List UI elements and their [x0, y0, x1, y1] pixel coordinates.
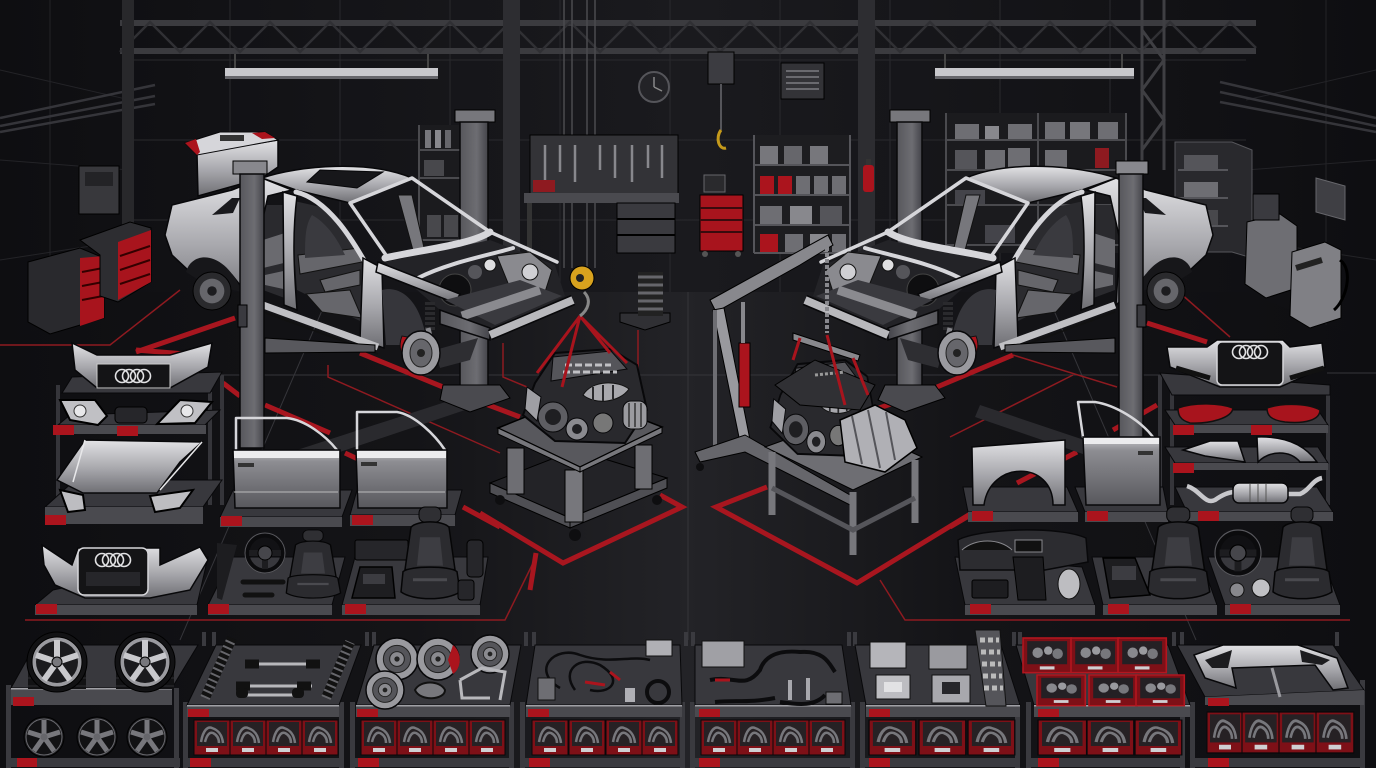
wall clock	[639, 72, 669, 102]
steering wheel and seat	[1215, 530, 1261, 576]
diagnostic machines right wall	[1245, 178, 1347, 328]
shelf: red hardware trays	[1016, 638, 1190, 767]
shelving back centre	[754, 135, 850, 253]
shelf: hoses and modules	[695, 641, 851, 767]
ceiling light left	[225, 54, 438, 79]
lower shelf row uprights	[6, 632, 1365, 768]
floor red guide lines	[0, 290, 1350, 620]
lifting hook and straps	[537, 316, 627, 387]
front bumper	[42, 545, 208, 598]
shelf: brakes	[356, 635, 521, 767]
steering wheel and seat set	[245, 533, 285, 573]
left interior platforms	[35, 507, 488, 615]
hoist and chains	[564, 0, 734, 268]
floor	[0, 292, 1376, 768]
lift post front left	[233, 161, 267, 448]
shelving back right	[946, 113, 1126, 253]
left parts rack	[45, 343, 222, 525]
left car body shell	[165, 166, 573, 375]
exhaust system	[1187, 478, 1322, 501]
right parts rack	[1160, 340, 1333, 521]
lift post front right	[1116, 161, 1148, 442]
ramp left	[297, 395, 480, 462]
tail lights	[1178, 404, 1233, 423]
right fender and door	[963, 402, 1168, 522]
shelf: electronic units	[855, 630, 1020, 767]
shelf: wheels	[11, 632, 198, 767]
wall vent box	[781, 63, 824, 99]
hood	[57, 440, 202, 493]
roof truss	[120, 0, 1256, 292]
lift post back left	[440, 110, 510, 412]
right engine on table	[765, 335, 922, 555]
pegboard and workbench	[524, 135, 679, 253]
left car sunroof	[307, 170, 383, 188]
ceiling light right	[935, 54, 1134, 79]
left engine on stand	[490, 266, 667, 541]
front bumper top right	[1167, 340, 1325, 387]
console and seat	[355, 540, 408, 560]
ramp right	[975, 405, 1120, 465]
front bumper top	[72, 343, 212, 388]
fire extinguisher	[863, 159, 874, 192]
right car body shell	[805, 166, 1213, 375]
storage cabinet right	[1175, 142, 1252, 258]
shelf: suspension	[187, 638, 361, 767]
shelf: roof panel and trim	[1177, 645, 1364, 767]
right interior platforms	[955, 507, 1340, 615]
lift post back right	[878, 110, 945, 412]
shelving back left	[419, 125, 479, 240]
engine crane	[695, 235, 860, 505]
left doors on platforms	[220, 412, 462, 527]
lift arm right	[1005, 338, 1115, 353]
headlights	[60, 400, 107, 425]
dashboard	[958, 530, 1088, 570]
tool chests left wall	[28, 166, 151, 334]
shelf: wiring	[526, 640, 682, 767]
trim pieces	[1183, 441, 1245, 462]
coil spring stack	[620, 272, 670, 330]
seat and console	[1148, 507, 1210, 599]
lift arm left	[265, 338, 375, 353]
red tool cabinet	[700, 175, 743, 257]
left car trunk lid	[185, 132, 278, 196]
